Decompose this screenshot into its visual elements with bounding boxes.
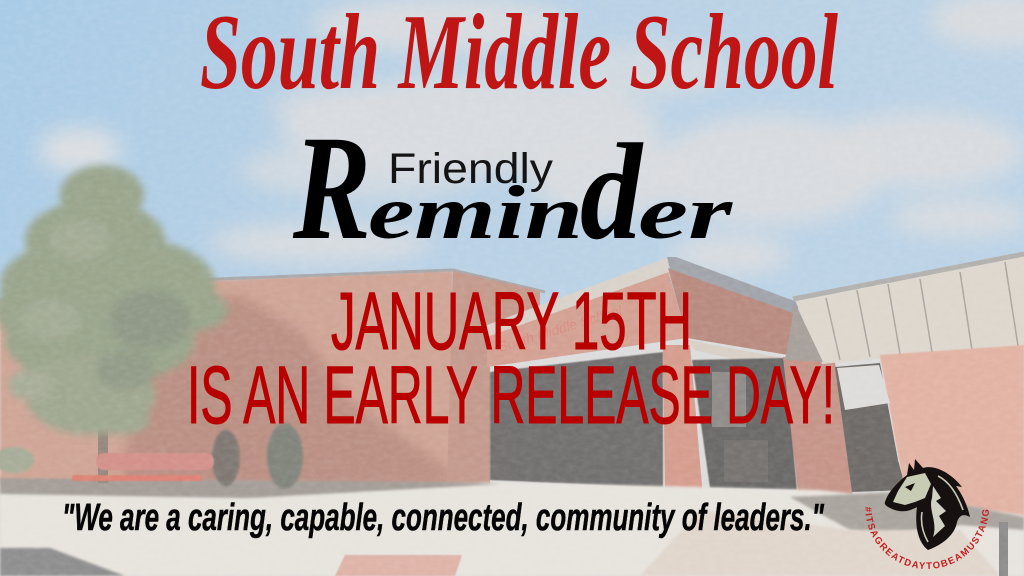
tree shadow on wall xyxy=(120,295,450,486)
right panel seams xyxy=(826,262,1018,360)
post xyxy=(999,522,1008,576)
entrance doors xyxy=(692,358,797,490)
logo: mustang badge: #ITSAGREATDAYTOBEAMUSTANG xyxy=(865,506,989,569)
entrance brick fascia xyxy=(487,270,687,367)
right window xyxy=(835,363,906,492)
right window pane xyxy=(837,365,890,410)
door glass xyxy=(712,372,746,427)
canopy top edge xyxy=(667,257,800,314)
brick wall right of door xyxy=(783,357,853,497)
word: Reminder: R xyxy=(292,105,371,271)
dark lobby windows xyxy=(490,352,663,488)
canopy roof strip xyxy=(487,258,669,337)
door lower panel xyxy=(724,440,768,482)
entrance sign letters: South Middle School xyxy=(496,302,625,355)
clouds xyxy=(38,0,1024,275)
announcement text xyxy=(187,276,835,441)
right upper panel xyxy=(795,255,1024,364)
hashtag arc xyxy=(865,507,989,569)
right brick wall xyxy=(880,345,1024,520)
mane flame xyxy=(931,486,946,537)
heading: Friendly Reminder xyxy=(292,105,734,271)
horse eye xyxy=(905,483,915,491)
logo: mustang badge xyxy=(865,459,989,569)
tree xyxy=(0,165,228,483)
shrubs xyxy=(0,423,303,489)
asphalt bottom left xyxy=(0,548,125,576)
right panel top edge xyxy=(793,254,1024,299)
word: Reminder: er xyxy=(638,171,734,255)
brick pillar xyxy=(663,345,703,497)
roof line of left wing xyxy=(190,270,545,292)
sky xyxy=(0,0,1024,320)
side wall xyxy=(447,271,540,484)
angled shadow xyxy=(785,303,823,362)
word: Reminder: emin xyxy=(368,171,583,255)
icon: horse head xyxy=(885,459,970,550)
walkway xyxy=(640,510,1000,576)
walkway shadow xyxy=(790,492,1024,535)
word: Reminder: d xyxy=(580,115,644,268)
red bench xyxy=(72,453,214,481)
ground xyxy=(0,482,1024,576)
line: January 15th: JANUARY 15TH xyxy=(331,276,692,367)
mane highlight xyxy=(921,476,963,542)
canopy right face xyxy=(668,268,800,357)
mulch strip xyxy=(0,478,500,498)
word: Friendly: Friendly xyxy=(388,145,554,193)
red paver xyxy=(335,555,462,576)
left brick wing xyxy=(0,270,453,484)
soffit xyxy=(688,340,783,360)
